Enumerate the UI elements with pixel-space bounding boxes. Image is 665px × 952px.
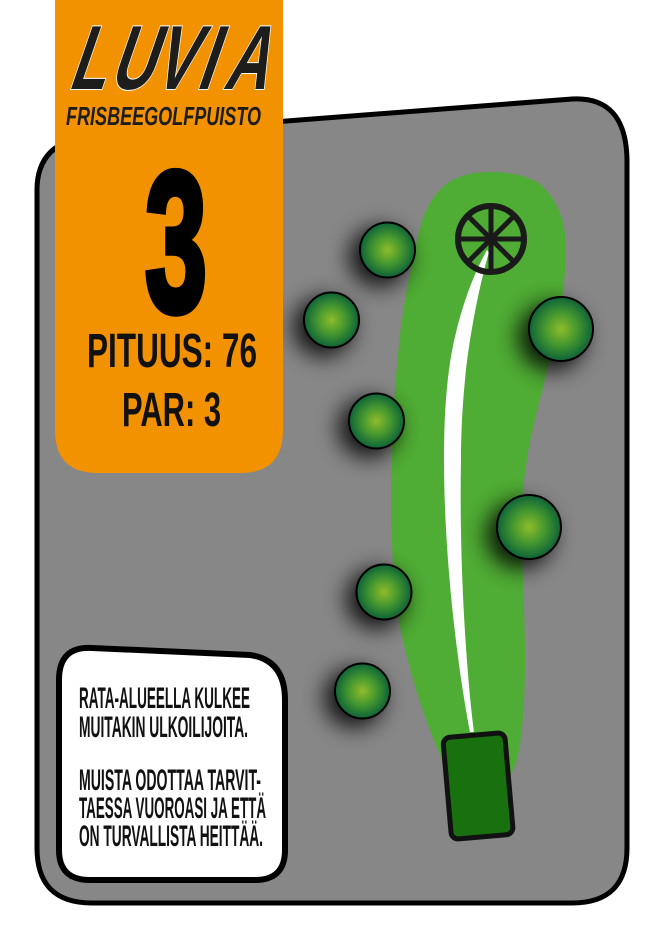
safety note text: MUITAKIN ULKOILIJOITA. — [79, 711, 248, 744]
tree 2 — [293, 292, 359, 357]
panel: safety note — [59, 648, 285, 880]
hole map infographic: ON TURVALLISTA HEITTÄÄ. — [79, 820, 263, 853]
safety note text — [79, 682, 266, 853]
tree 5 — [486, 495, 561, 569]
tree 6 — [346, 564, 412, 629]
icon: basket — [458, 206, 524, 272]
hole number: 3 — [145, 131, 207, 354]
panel: orange sign — [55, 0, 283, 473]
tree 1 — [349, 222, 415, 287]
tree 4 — [338, 394, 404, 458]
tee pad — [443, 732, 513, 840]
subtitle: frisbeegolfpuisto: FRISBEEGOLFPUISTO — [66, 101, 261, 131]
length: PITUUS: 76 — [87, 325, 257, 378]
throwing line — [444, 250, 489, 732]
fairway — [391, 172, 566, 790]
hole map infographic: RATA-ALUEELLA KULKEE — [79, 682, 250, 715]
hole map infographic: TAESSA VUOROASI JA ETTÄ — [79, 792, 266, 825]
title: Luvia: LUVIA — [60, 6, 294, 108]
par: PAR: 3 — [122, 384, 221, 437]
tree 7 — [324, 664, 390, 728]
hole map infographic: MUISTA ODOTTAA TARVIT- — [79, 764, 261, 797]
panel: grey course card — [37, 99, 627, 903]
tree 3 — [518, 297, 593, 371]
